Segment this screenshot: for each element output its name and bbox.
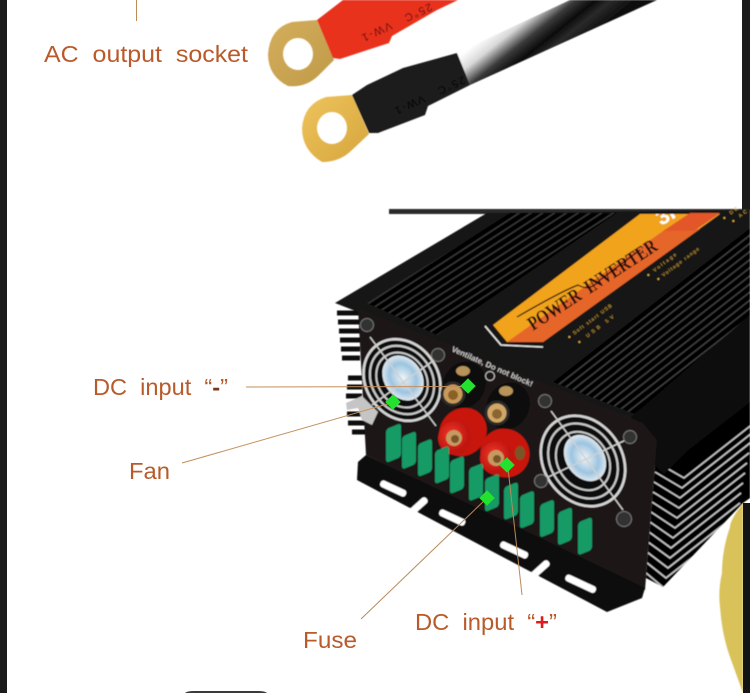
left top fins bbox=[367, 213, 617, 335]
front panel bbox=[358, 308, 657, 590]
bottom edge object bbox=[185, 691, 267, 693]
red DC terminal 1 bbox=[429, 398, 497, 466]
right border bar bbox=[742, 0, 750, 210]
black sleeve bbox=[352, 53, 470, 133]
feature bullets: ● DC bbox=[722, 206, 740, 222]
ventilation warning: Ventilate, Do not block! bbox=[450, 345, 534, 389]
top body bbox=[335, 210, 750, 423]
black cable bbox=[457, 0, 657, 85]
label: AC output socket: AC output socket bbox=[44, 41, 249, 67]
label: Fuse: Fuse bbox=[303, 627, 357, 653]
mounting flange bbox=[357, 455, 645, 612]
black DC terminal 1 bbox=[434, 354, 494, 416]
black sleeve print: 25°C VW-1 bbox=[391, 73, 467, 117]
flange slots bbox=[379, 479, 597, 594]
feature bullets: ● USB 5V bbox=[577, 314, 616, 346]
wing nut bbox=[346, 396, 378, 425]
orange label bbox=[493, 213, 720, 342]
power inverter product bbox=[335, 195, 750, 612]
left side fins bbox=[337, 313, 368, 432]
leader line: AC output socket bbox=[136, 0, 138, 21]
leader line: DC input plus bbox=[508, 468, 522, 595]
label: Fan: Fan bbox=[129, 458, 170, 484]
smooth top plate bbox=[630, 315, 750, 454]
label chevron trim bbox=[485, 326, 543, 347]
left border bar bbox=[0, 0, 7, 693]
red sleeve print: 25°C VW-1 bbox=[358, 0, 434, 44]
gold object at bottom right bbox=[719, 503, 743, 693]
cable with black ring terminal bbox=[302, 0, 657, 162]
right lower border bar bbox=[743, 503, 750, 693]
feature bullets bbox=[567, 206, 749, 346]
fuses bbox=[386, 423, 592, 555]
minus symbol bbox=[486, 372, 494, 380]
leader line: DC input minus bbox=[246, 386, 462, 388]
right side fins bbox=[640, 395, 750, 590]
label: DC input plus: DC input “+” bbox=[415, 609, 557, 635]
feature bullets: ● Soft start USB bbox=[567, 303, 614, 341]
leader line: Fuse bbox=[361, 498, 487, 619]
right fan bbox=[524, 394, 642, 526]
ring terminal: black bbox=[302, 95, 369, 162]
feature bullets: ● Voltage bbox=[646, 252, 678, 279]
label wattage: 3K bbox=[651, 195, 688, 230]
left fan bbox=[348, 318, 456, 436]
marker: Fuse bbox=[479, 490, 495, 506]
marker: Fan bbox=[385, 394, 401, 410]
label swoosh bbox=[517, 250, 640, 317]
feature bullets: ● AC bbox=[731, 209, 749, 225]
leader line: Fan bbox=[182, 403, 391, 463]
cable with red ring terminal bbox=[268, 0, 458, 86]
ring terminal: red bbox=[268, 20, 334, 86]
red DC terminal 2 bbox=[470, 419, 540, 487]
corner behind front panel bbox=[636, 414, 686, 474]
marker: DC input plus bbox=[499, 457, 515, 473]
top edge strip bbox=[389, 209, 750, 214]
red sleeve bbox=[317, 0, 458, 59]
marker: DC input minus bbox=[460, 378, 476, 394]
black DC terminal 2 bbox=[478, 375, 538, 437]
right top fins bbox=[553, 228, 750, 415]
label: DC input minus: DC input “-” bbox=[93, 374, 228, 400]
feature bullets: ● Voltage range bbox=[656, 246, 701, 283]
label title: POWER INVERTER bbox=[524, 235, 662, 335]
